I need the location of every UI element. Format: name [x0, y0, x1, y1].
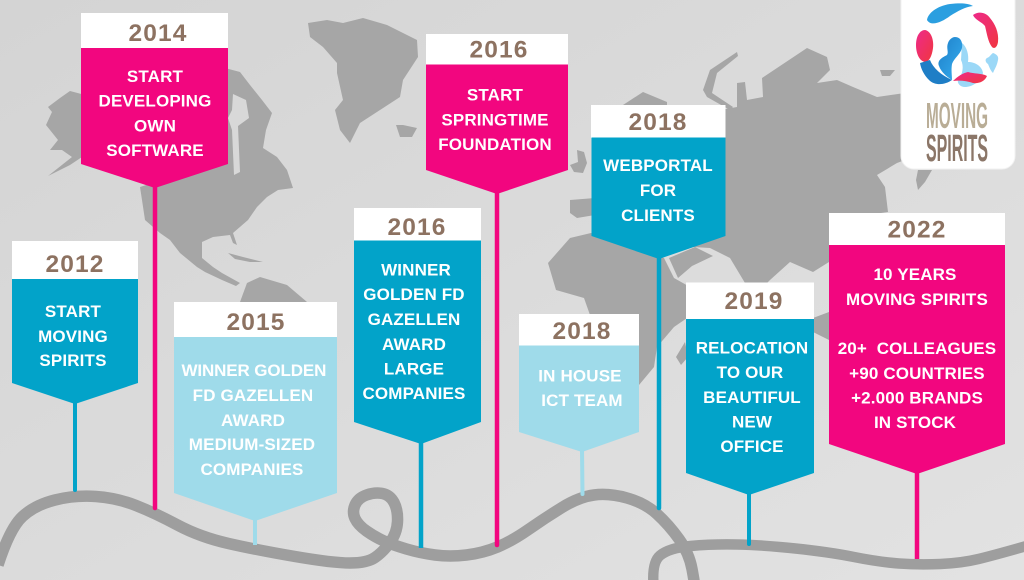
milestone 2015: 2015 [227, 309, 285, 336]
milestone 2016 foundation [426, 34, 568, 545]
milestone 2019: BEAUTIFUL [703, 388, 801, 407]
milestone 2016 large companies: COMPANIES [362, 384, 466, 403]
milestone 2022 [829, 213, 1005, 559]
milestone 2022: +2.000 BRANDS [851, 388, 983, 408]
milestone 2018 webportal: 2018 [629, 109, 687, 136]
milestone 2015: MEDIUM-SIZED [189, 435, 315, 454]
milestone 2014: SOFTWARE [106, 141, 204, 160]
road: left ribbon with loop [0, 493, 695, 580]
milestone 2014: 2014 [129, 20, 187, 47]
milestone 2014: OWN [134, 116, 176, 135]
milestone 2022: +90 COUNTRIES [849, 364, 985, 383]
milestone 2015 [174, 302, 337, 545]
milestone 2014: DEVELOPING [99, 92, 211, 111]
milestone 2018 ICT team [519, 314, 639, 494]
milestone 2015: COMPANIES [200, 460, 304, 479]
milestone 2019: NEW [732, 413, 773, 432]
milestone 2016 foundation: 2016 [470, 36, 528, 64]
milestone 2016 foundation: SPRINGTIME [441, 110, 549, 129]
milestone 2012: 2012 [46, 251, 104, 278]
milestone 2019 [686, 282, 814, 544]
milestone 2022: 10 YEARS [873, 265, 957, 284]
milestone 2015: WINNER GOLDEN [182, 361, 326, 380]
milestone 2019: 2019 [725, 288, 783, 315]
milestone 2018 ICT team: IN HOUSE [538, 367, 622, 386]
milestone 2022: 2022 [888, 217, 946, 244]
milestone 2014 [81, 13, 228, 508]
milestone 2012: MOVING [38, 327, 108, 346]
road: right ribbon [653, 544, 1024, 580]
milestone 2016 foundation: FOUNDATION [438, 135, 552, 154]
milestone 2015: FD GAZELLEN [193, 386, 313, 405]
milestone 2018 webportal: WEBPORTAL [603, 156, 713, 175]
milestone 2022: MOVING SPIRITS [846, 290, 988, 309]
milestone 2016 large companies: GOLDEN FD [363, 285, 465, 304]
milestone 2012: START [45, 302, 102, 321]
world map [46, 18, 932, 395]
milestone 2016 large companies: LARGE [384, 360, 444, 378]
milestone 2019: TO OUR [717, 363, 783, 382]
milestone 2016 foundation: START [467, 86, 524, 105]
milestone 2014: START [127, 67, 184, 86]
milestone 2016 large companies: AWARD [382, 335, 446, 354]
milestone 2019: RELOCATION [696, 338, 808, 357]
milestone 2016 large companies: 2016 [388, 214, 446, 241]
milestone 2018 ICT team: ICT TEAM [541, 391, 623, 410]
milestone 2016 large companies [354, 208, 481, 548]
milestone 2022: IN STOCK [874, 413, 957, 432]
logo wordmark [926, 95, 988, 170]
milestone 2012: SPIRITS [39, 351, 107, 370]
milestone 2015: AWARD [221, 411, 285, 430]
logo panel [901, 0, 1015, 170]
milestone 2018 ICT team: 2018 [553, 318, 611, 345]
milestone 2012 [12, 241, 138, 490]
milestone 2016 large companies: WINNER [381, 260, 451, 280]
milestone 2018 webportal [591, 105, 726, 508]
milestone 2016 large companies: GAZELLEN [368, 310, 460, 329]
milestone 2019: OFFICE [720, 437, 784, 456]
milestone 2018 webportal: FOR [640, 181, 676, 200]
milestone 2022: 20+ COLLEAGUES [838, 339, 996, 358]
milestone 2018 webportal: CLIENTS [621, 206, 695, 225]
icon: swirl emblem [916, 3, 998, 87]
